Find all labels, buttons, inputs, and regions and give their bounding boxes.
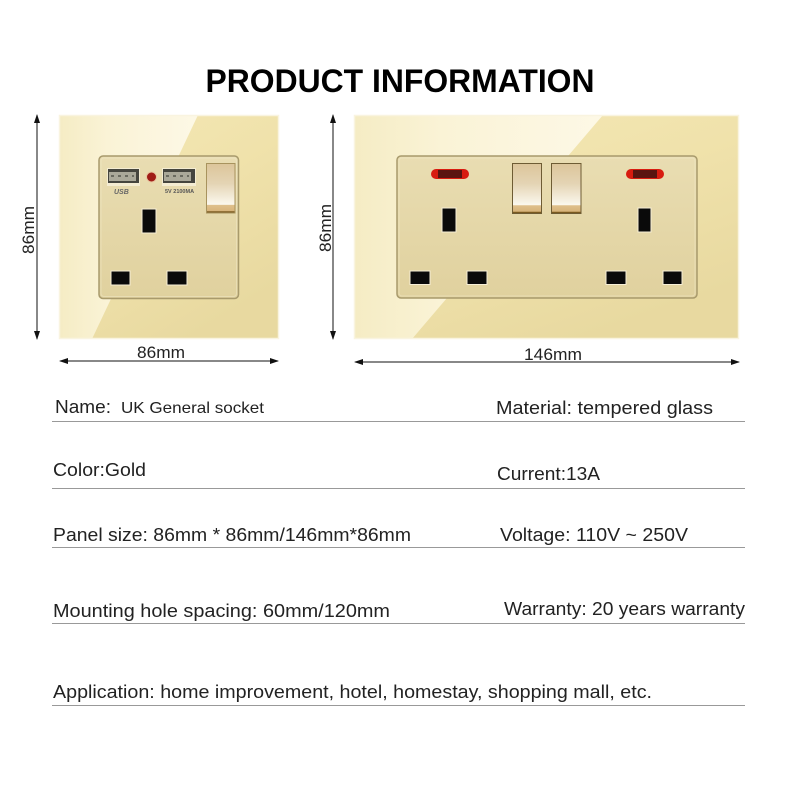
USB port: right (162, 168, 196, 186)
dimension label: double socket width: 146mm (524, 345, 582, 364)
live hole: left socket (410, 271, 430, 284)
earth hole (142, 209, 156, 233)
title: PRODUCT INFORMATION (206, 63, 594, 99)
glass plate: double socket (354, 115, 739, 339)
spec row: application: Application: home improvement, hotel, homestay, shopping mall, etc. (53, 681, 652, 702)
neon indicator: left (431, 169, 469, 179)
socket faceplate (397, 156, 697, 298)
spec row: mounting hole spacing and warranty: Warranty: 20 years warranty (504, 598, 746, 619)
socket faceplate (99, 156, 238, 298)
arrow: height of double socket (332, 115, 334, 339)
spec row: name and material: Material: tempered glass (496, 397, 713, 418)
live hole (111, 271, 130, 285)
spec row: panel size and voltage: Panel size: 86mm * 86mm/146mm*86mm (53, 524, 411, 545)
USB port: left (107, 168, 140, 186)
label: USB rating: 5V 2100MA (165, 189, 194, 195)
spec row: panel size and voltage: Voltage: 110V ~ 250V (500, 524, 689, 545)
panel: single socket (59, 115, 279, 339)
neon indicator: right (626, 169, 664, 179)
rocker switch: left (512, 164, 542, 214)
indicator light (146, 172, 156, 182)
spec row: panel size and voltage (52, 524, 745, 548)
arrow: width of single socket (60, 360, 278, 362)
earth hole: right (638, 208, 651, 232)
neutral hole: left socket (467, 271, 487, 284)
rocker switch: right (552, 164, 581, 214)
arrow: height of single socket (36, 115, 38, 339)
spec row: mounting hole spacing and warranty (52, 598, 746, 624)
spec row: color and current: Color:Gold (53, 459, 146, 480)
neutral hole (167, 271, 187, 285)
label: USB mark: USB (114, 189, 129, 196)
spec row: name and material: UK General socket (121, 400, 265, 417)
spec row: name and material: Name: (55, 397, 111, 417)
live hole: right socket (606, 271, 626, 284)
earth hole: left (442, 208, 456, 232)
glass plate: single socket (59, 115, 279, 339)
dimension label: double socket height: 86mm (316, 204, 335, 252)
spec row: name and material (52, 397, 745, 422)
neutral hole: right socket (663, 271, 682, 284)
spec row: color and current: Current:13A (497, 463, 601, 484)
dimension label: single socket width: 86mm (137, 343, 185, 362)
panel: double socket (354, 115, 739, 339)
spec row: color and current (52, 459, 745, 488)
spec row: mounting hole spacing and warranty: Mounting hole spacing: 60mm/120mm (53, 600, 390, 621)
arrow: width of double socket (355, 361, 739, 363)
dimension label: single socket height: 86mm (19, 206, 38, 254)
rocker switch (206, 164, 235, 213)
